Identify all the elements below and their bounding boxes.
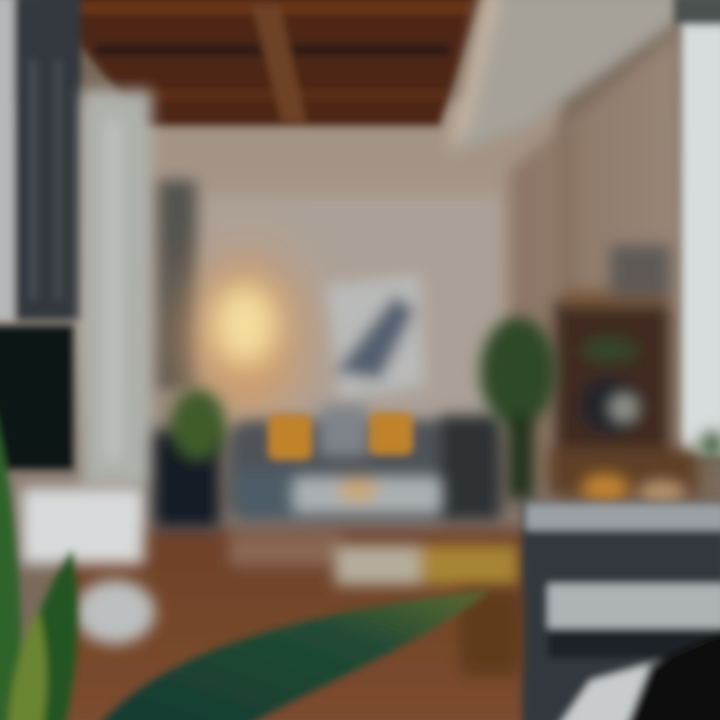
sofa (228, 405, 503, 520)
lamp glow (187, 255, 303, 425)
striped armchair on the right (522, 502, 720, 720)
left dark curtain column (0, 0, 81, 320)
shelf with decor (548, 245, 698, 496)
items on the side table (581, 431, 720, 504)
right wall (510, 30, 690, 480)
dark column at the back wall (158, 180, 196, 390)
wood stool beside the armchair (460, 590, 520, 675)
orange cushions (268, 412, 413, 460)
black cabinet on the left (0, 325, 74, 470)
white ceiling on the right (448, 0, 680, 155)
dark foreground object with white cushion (555, 630, 720, 720)
white curtain (82, 90, 152, 485)
floor (60, 530, 560, 720)
coffee table (292, 476, 518, 585)
wooden ceiling with beams (35, 0, 485, 126)
wall painting (325, 275, 425, 400)
potted plant in the centre (154, 389, 226, 528)
white furniture on the left (22, 488, 155, 644)
back wall (0, 100, 560, 560)
foreground snake plant on the left (0, 395, 78, 720)
green plant by the shelf (480, 317, 640, 500)
foreground leaf (95, 590, 490, 720)
window on the right (674, 0, 720, 455)
